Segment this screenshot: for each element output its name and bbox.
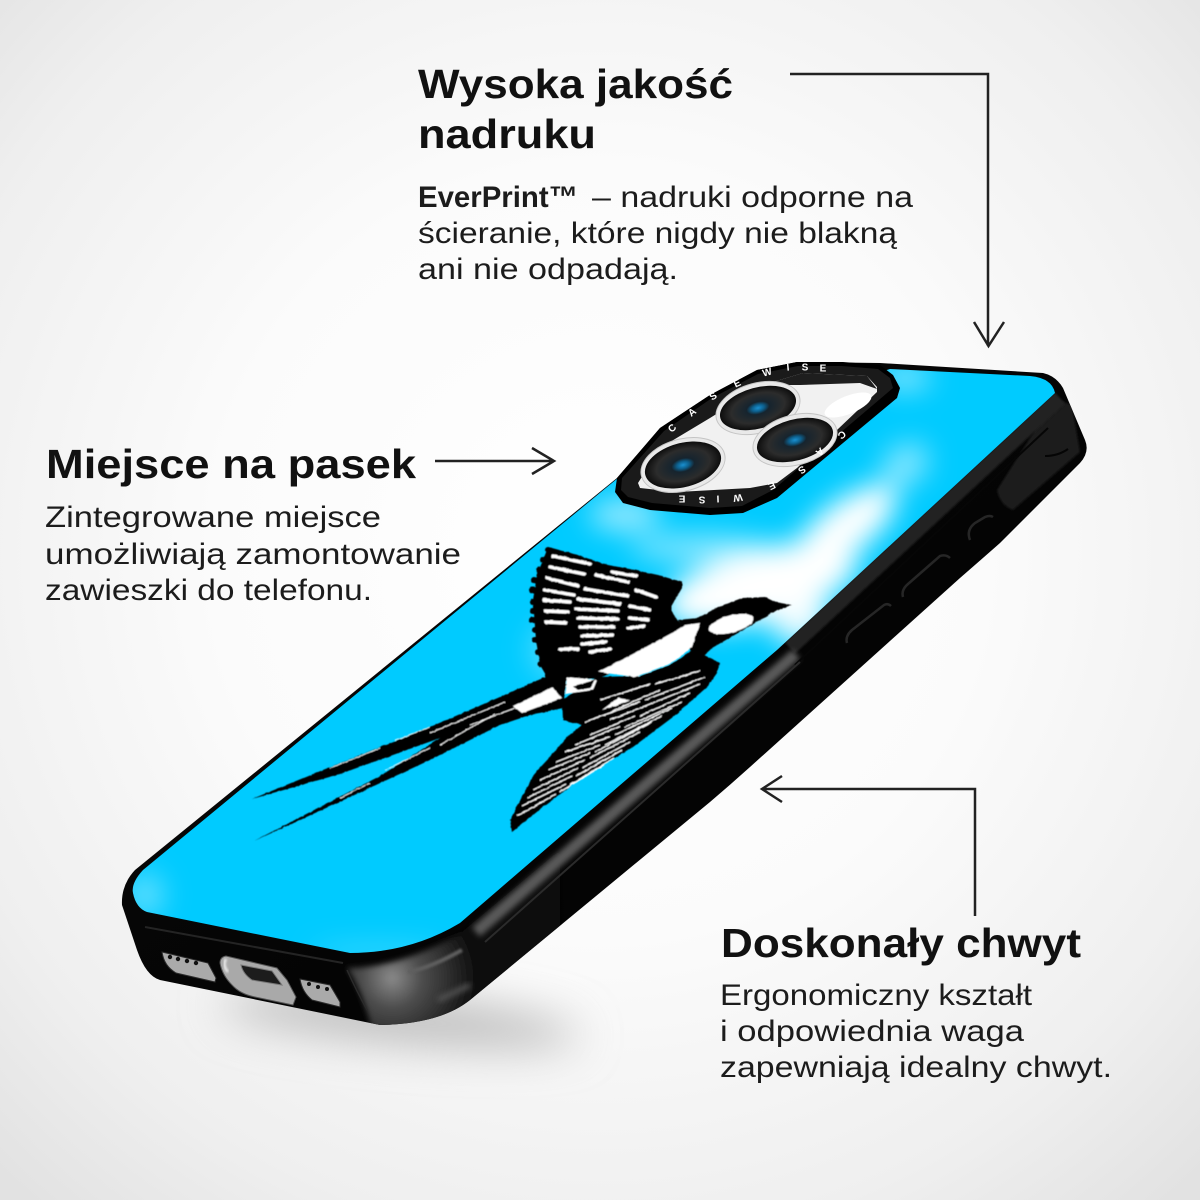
- brand text top: S: [802, 362, 809, 374]
- body text: zapewniają idealny chwyt.: [720, 1051, 1112, 1084]
- heading: nadruku: [418, 111, 596, 157]
- arrow to print surface: [790, 74, 1004, 346]
- side buttons: [847, 516, 993, 643]
- body text: ani nie odpadają.: [418, 253, 678, 286]
- lower wing: [510, 650, 720, 832]
- heading: [418, 61, 733, 157]
- brand text bottom: S: [795, 463, 807, 476]
- lens top: [710, 373, 806, 443]
- callout: grip: [720, 776, 1112, 1084]
- callout: strap slot: [45, 441, 554, 607]
- lens right: [747, 405, 843, 475]
- body text: [720, 979, 1112, 1084]
- clouds: [127, 366, 938, 958]
- upper wing: [532, 550, 684, 682]
- bottom speaker left: [162, 952, 216, 982]
- cheek patch: [707, 610, 755, 638]
- brand text top: S: [708, 390, 720, 403]
- heading: Doskonały chwyt: [721, 920, 1081, 966]
- body text: Ergonomiczny kształt: [720, 979, 1033, 1012]
- phone case illustration: [122, 362, 1087, 1030]
- charging port: [220, 956, 296, 1005]
- case body: [122, 362, 1087, 1025]
- brand text top: [666, 362, 827, 435]
- rump: [565, 677, 597, 694]
- brand text bottom: E: [766, 479, 777, 492]
- phone drop shadow: [219, 982, 581, 1058]
- heading: Wysoka jakość: [418, 61, 733, 107]
- brand text top: W: [761, 366, 774, 380]
- body text: – nadruki odporne na: [592, 181, 913, 214]
- heading: Miejsce na pasek: [46, 441, 416, 487]
- brand text top: A: [686, 406, 699, 419]
- ring face: [621, 366, 893, 508]
- brand text bottom: S: [698, 494, 705, 504]
- brand text top: C: [666, 422, 679, 435]
- brand text top: E: [732, 377, 743, 390]
- camera island: [615, 362, 900, 515]
- brand text bottom: I: [716, 492, 720, 504]
- callout: print quality: [418, 61, 1004, 346]
- brand text bottom: W: [732, 491, 743, 503]
- rump marks: [553, 680, 595, 696]
- glossy bottom corner: [346, 872, 562, 1025]
- feather tips: [532, 550, 570, 675]
- side shading: [145, 398, 1080, 1030]
- brand text bottom: A: [813, 445, 826, 458]
- brand text bottom: C: [835, 428, 848, 441]
- brand text top: E: [820, 364, 827, 374]
- arrow to case side: [762, 776, 975, 916]
- body text: Zintegrowane miejsce: [45, 501, 381, 534]
- arrow to strap slot: [435, 448, 554, 474]
- bird head: [678, 597, 792, 658]
- camera window: [638, 373, 877, 492]
- bird artwork: [252, 550, 792, 841]
- brand text bottom: [678, 428, 848, 504]
- lens left: [635, 429, 731, 501]
- tail streamers: [252, 673, 567, 841]
- body text: umożliwiają zamontowanie: [45, 538, 461, 571]
- body text: [45, 501, 461, 607]
- feather highlights: [544, 556, 656, 652]
- white belly: [598, 623, 700, 677]
- blue print surface: [133, 369, 1055, 953]
- body text: ścieranie, które nigdy nie blakną: [418, 217, 897, 250]
- body text: i odpowiednia waga: [720, 1015, 1024, 1048]
- body text: EverPrint™: [418, 181, 578, 214]
- body text: [418, 181, 913, 286]
- body text: zawieszki do telefonu.: [45, 574, 372, 607]
- brand text top: I: [786, 362, 790, 374]
- brand text bottom: E: [678, 492, 685, 504]
- bottom speaker right: [300, 979, 340, 1007]
